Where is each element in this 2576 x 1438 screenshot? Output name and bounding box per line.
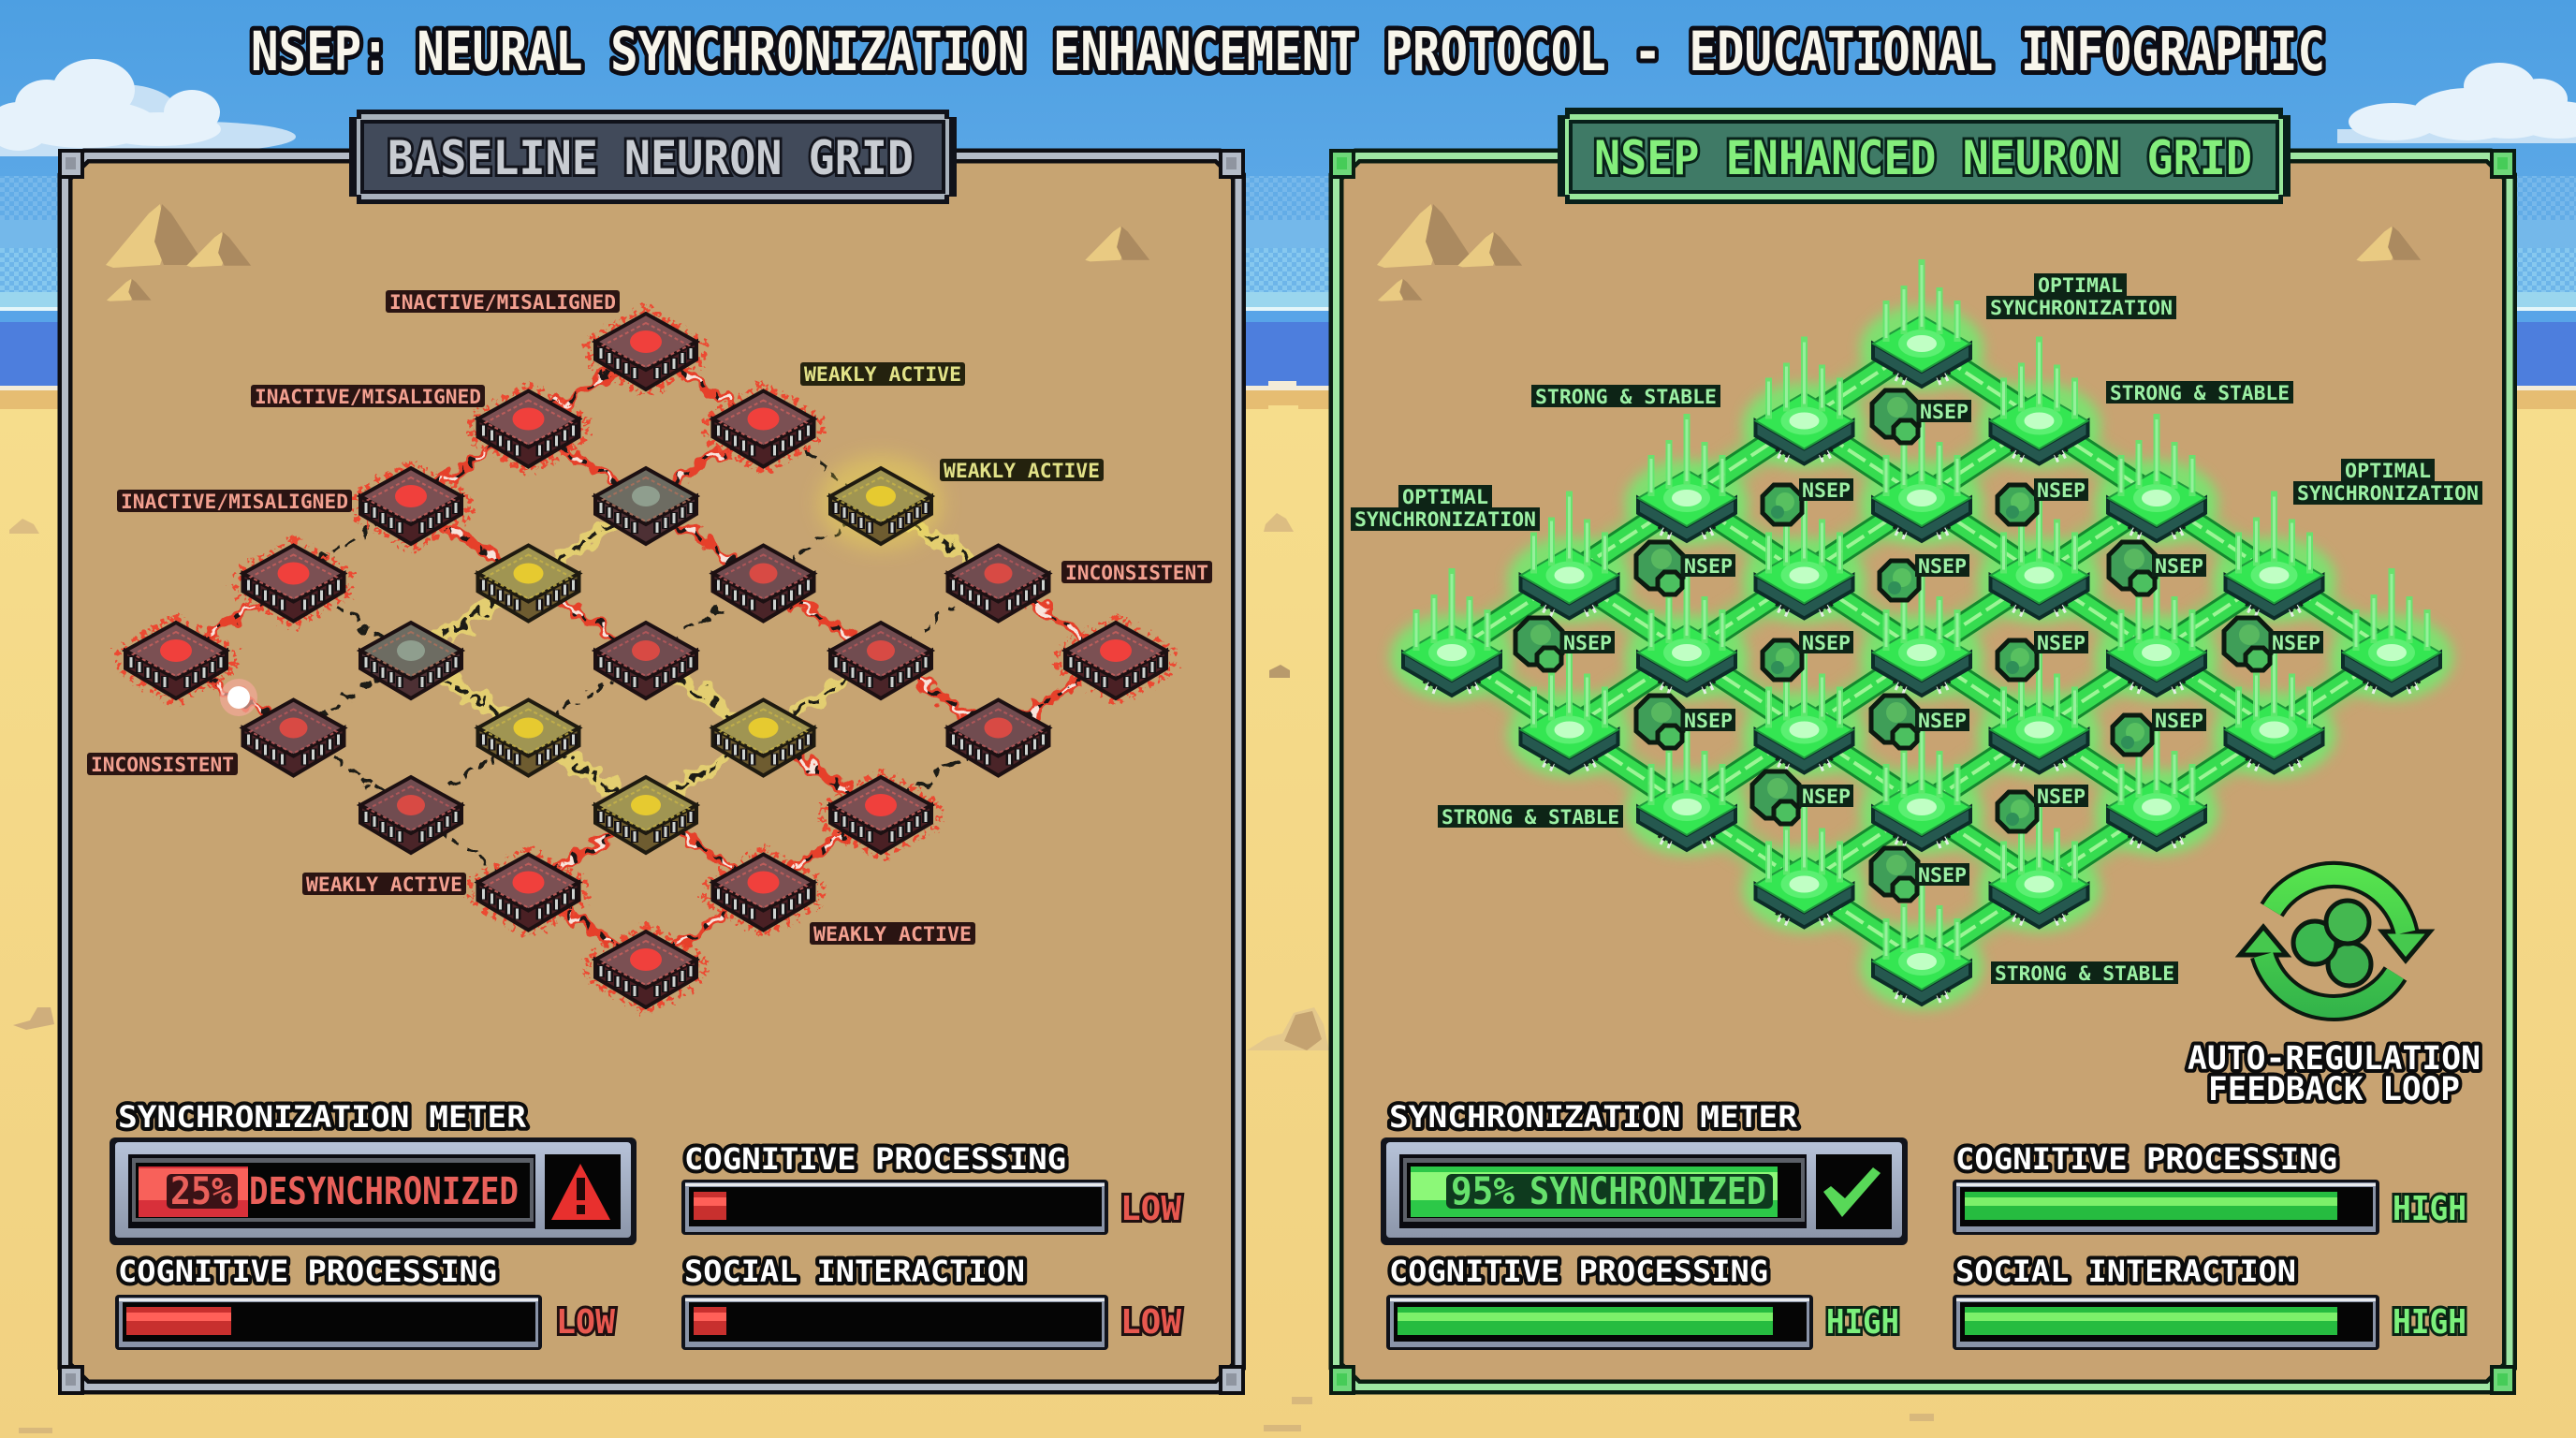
synchronization meter 25%: DESYNCHRONIZED <box>249 1170 519 1213</box>
text: auto-regulation feedback loop: AUTO-REGULATION <box>2188 1040 2481 1078</box>
panel frame right <box>1331 151 2514 1393</box>
bar: social interaction high: HIGH <box>2393 1303 2466 1342</box>
platform glow <box>1390 305 2453 1009</box>
heading: cognitive processing right column 2: COGNITIVE PROCESSING <box>1955 1141 2337 1177</box>
NSEP marker labels <box>1560 400 2323 887</box>
NSEP marker labels: NSEP <box>2037 785 2086 808</box>
label: optimal synchronization left: SYNCHRONIZATION <box>1354 508 1536 531</box>
header: baseline neuron grid: BASELINE NEURON GRID <box>388 131 914 185</box>
synchronization meter 25% <box>110 1137 637 1245</box>
NSEP marker labels: NSEP <box>2272 632 2320 654</box>
panel: NSEP enhanced neuron grid <box>1331 108 2514 1393</box>
panel frame left <box>60 151 1243 1393</box>
label: optimal synchronization right <box>2293 459 2482 505</box>
heading: social interaction right: SOCIAL INTERACTION <box>1955 1254 2296 1289</box>
light beams rising from platforms <box>1416 259 2427 960</box>
bar: cognitive processing high: HIGH <box>1826 1303 1899 1342</box>
label: strong and stable bottom: STRONG & STABLE <box>1995 962 2174 985</box>
heading: social interaction: SOCIAL INTERACTION <box>684 1254 1025 1289</box>
NSEP marker labels: NSEP <box>1802 479 1851 502</box>
label: inactive/misaligned left: INACTIVE/MISALIGNED <box>121 491 348 513</box>
NSEP marker labels: NSEP <box>2155 555 2203 578</box>
bar: cognitive processing low (column 2): LOW <box>1120 1190 1181 1228</box>
label: weakly active lower right: WEAKLY ACTIVE <box>813 923 972 946</box>
text: auto-regulation feedback loop <box>2188 1040 2481 1108</box>
NSEP marker labels: NSEP <box>1684 710 1733 732</box>
bar: cognitive processing high column 2 <box>1953 1180 2466 1235</box>
label: optimal synchronization top: OPTIMAL <box>2038 274 2123 297</box>
NSEP marker labels: NSEP <box>2037 479 2086 502</box>
NSEP marker labels: NSEP <box>1920 401 1969 423</box>
decorative dunes left panel <box>106 204 1149 301</box>
icon: warning triangle <box>545 1154 621 1229</box>
synchronization meter 95%: SYNCHRONIZED <box>1530 1170 1766 1213</box>
heading: cognitive processing (column 2): COGNITIVE PROCESSING <box>684 1141 1066 1177</box>
cloud right <box>2337 63 2576 143</box>
bar: social interaction low <box>681 1295 1181 1350</box>
NSEP marker labels: NSEP <box>1684 555 1733 578</box>
neuron connections baseline <box>176 348 1116 966</box>
header: NSEP enhanced neuron grid <box>1558 108 2291 204</box>
heading: synchronization meter right: SYNCHRONIZATION METER <box>1389 1099 1798 1135</box>
neuron halos <box>118 308 1174 1013</box>
neuron network enhanced connections <box>1452 344 2392 961</box>
heading: synchronization meter: SYNCHRONIZATION METER <box>118 1099 527 1135</box>
NSEP marker labels: NSEP <box>1918 864 1967 887</box>
synchronization meter 25%: 25% <box>170 1170 232 1213</box>
text: auto-regulation feedback loop: FEEDBACK LOOP <box>2208 1071 2460 1108</box>
label: inconsistent left: INCONSISTENT <box>91 754 234 776</box>
NSEP marker labels: NSEP <box>2037 632 2086 654</box>
label: optimal synchronization top <box>1986 273 2176 319</box>
bar: cognitive processing low <box>115 1295 615 1350</box>
heading: cognitive processing right: COGNITIVE PROCESSING <box>1389 1254 1768 1289</box>
neuron platforms enhanced <box>1403 315 2440 1005</box>
synchronization meter 95%: 95% <box>1451 1170 1515 1213</box>
NSEP marker labels: NSEP <box>1802 632 1851 654</box>
NSEP marker labels: NSEP <box>1563 632 1612 654</box>
bar: cognitive processing high column 2: HIGH <box>2393 1190 2466 1228</box>
label: optimal synchronization right: OPTIMAL <box>2345 460 2431 482</box>
label: optimal synchronization left <box>1351 485 1540 531</box>
icon: auto-regulation feedback loop <box>2240 874 2430 1007</box>
label: inactive/misaligned middle: INACTIVE/MISALIGNED <box>255 386 481 408</box>
NSEP marker labels: NSEP <box>1918 710 1967 732</box>
label: weakly active top: WEAKLY ACTIVE <box>804 363 961 386</box>
heading: cognitive processing: COGNITIVE PROCESSING <box>118 1254 497 1289</box>
label: optimal synchronization right: SYNCHRONIZATION <box>2297 482 2479 505</box>
decorative dunes right panel <box>1377 204 2421 301</box>
synchronization meter 95% <box>1381 1137 1908 1245</box>
neuron chips baseline <box>125 314 1166 1007</box>
bar: cognitive processing low: LOW <box>556 1303 615 1342</box>
label: optimal synchronization left: OPTIMAL <box>1402 486 1488 508</box>
icon: check mark <box>1816 1154 1892 1229</box>
label: inactive/misaligned top: INACTIVE/MISALIGNED <box>389 291 616 314</box>
NSEP marker labels: NSEP <box>1802 785 1851 808</box>
label: weakly active lower left: WEAKLY ACTIVE <box>306 873 462 896</box>
NSEP marker labels: NSEP <box>1918 555 1967 578</box>
NSEP molecule markers <box>1515 390 2271 901</box>
label: weakly active right: WEAKLY ACTIVE <box>944 460 1100 482</box>
bar: social interaction high <box>1953 1295 2466 1350</box>
header: NSEP enhanced neuron grid: NSEP ENHANCED NEURON GRID <box>1594 131 2252 185</box>
label: strong and stable upper right: STRONG & STABLE <box>2110 382 2290 404</box>
bar: cognitive processing low (column 2) <box>681 1180 1181 1235</box>
bar: cognitive processing high <box>1386 1295 1899 1350</box>
label: strong and stable upper left: STRONG & STABLE <box>1535 386 1717 408</box>
label: inconsistent right: INCONSISTENT <box>1065 562 1208 584</box>
label: strong and stable lower left: STRONG & STABLE <box>1442 806 1619 829</box>
panel: baseline neuron grid <box>60 110 1243 1393</box>
NSEP marker labels: NSEP <box>2155 710 2203 732</box>
bar: social interaction low: LOW <box>1120 1303 1181 1342</box>
label: optimal synchronization top: SYNCHRONIZATION <box>1990 297 2173 319</box>
header: baseline neuron grid <box>349 110 957 204</box>
cloud left <box>0 59 296 156</box>
